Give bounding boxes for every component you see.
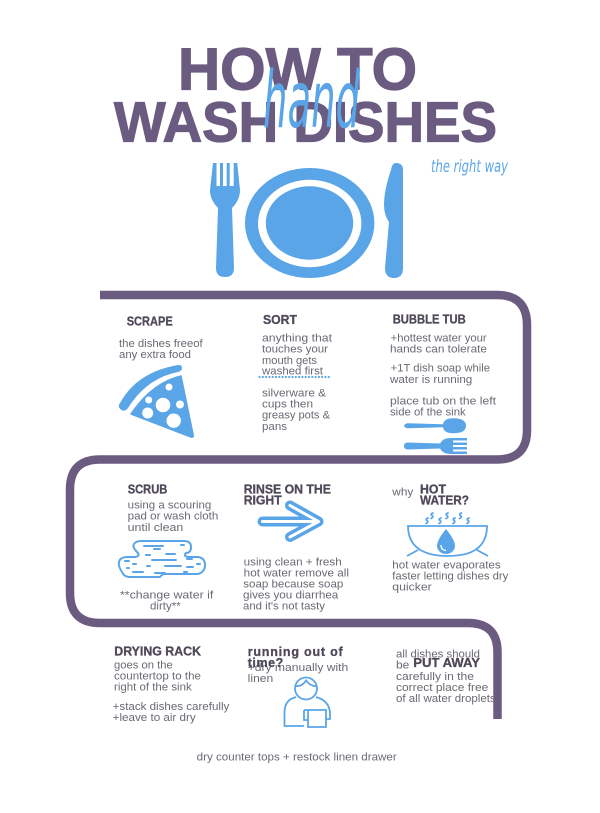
- icon: bowl of hot water: [407, 513, 488, 556]
- text: hot water: faster letting dishes dry: [392, 571, 509, 583]
- text: put away: correct place free: [396, 682, 488, 694]
- icon: arrow: [262, 506, 318, 537]
- text: sort: mouth gets: [262, 355, 317, 367]
- text: bubble tub: [389, 333, 497, 419]
- panel: scrape: [119, 315, 204, 437]
- text: sort: anything that: [262, 333, 333, 345]
- heading: drying rack: DRYING RACK: [114, 645, 201, 659]
- text: rinse: soap because soap: [243, 579, 343, 591]
- icon: fork, plate and knife: [210, 163, 403, 278]
- text: scrub: [128, 500, 218, 534]
- text: sort: [261, 333, 333, 433]
- panel: put away: [396, 649, 496, 705]
- text: bubble tub: water is running: [389, 374, 472, 386]
- icon: spoon and fork: [404, 418, 467, 454]
- text: scrub: until clean: [128, 522, 183, 534]
- text: bubble tub: place tub on the left: [390, 396, 497, 408]
- heading: rinse: [244, 483, 331, 508]
- text: put away: of all water droplets: [396, 693, 496, 705]
- heading: bubble tub: BUBBLE TUB: [393, 313, 466, 327]
- text: sort: greasy pots &: [262, 410, 331, 422]
- panel: drying rack: [113, 645, 230, 724]
- heading: put away: PUT AWAY: [413, 656, 481, 670]
- heading: rinse: RIGHT: [244, 494, 282, 508]
- icon: sponge: [119, 541, 205, 577]
- text: rinse: gives you diarrhea: [243, 590, 339, 602]
- text: put away: all dishes should: [396, 649, 480, 661]
- title: HOW TO: [178, 36, 417, 102]
- heading: why hot water: [391, 483, 469, 508]
- icon: person holding towel: [284, 678, 330, 727]
- text: sort: cups then: [262, 399, 313, 411]
- panel: bubble tub: [389, 313, 497, 454]
- title: [114, 36, 497, 154]
- text: bubble tub: +hottest water your: [391, 333, 487, 345]
- text: drying rack: goes on the: [114, 660, 173, 672]
- text: bubble tub: side of the sink: [390, 407, 466, 419]
- note: change water: dirty**: [150, 601, 181, 613]
- dotted underline: [260, 376, 332, 378]
- heading: rinse: RINSE ON THE: [244, 483, 331, 497]
- footer note: dry counter tops + restock linen drawer: [197, 752, 397, 764]
- text: dry manually: [248, 662, 348, 685]
- heading: running out of time: running out of: [248, 645, 344, 659]
- panel: scrub: [119, 483, 218, 613]
- heading: why hot water: why: [391, 487, 414, 499]
- panel: sort: [260, 313, 333, 433]
- text: hot water: quicker: [392, 582, 432, 594]
- text: sort: touches your: [262, 344, 328, 356]
- text: put away: be: [396, 660, 409, 672]
- note: change water: [120, 590, 214, 613]
- heading: running out of time: [248, 645, 344, 670]
- heading: running out of time: time?: [248, 656, 283, 670]
- text: bubble tub: hands can tolerate: [390, 344, 487, 356]
- heading: why hot water: WATER?: [420, 494, 469, 508]
- text: bubble tub: +1T dish soap while: [391, 363, 490, 375]
- text: dry manually: +dry manually with: [248, 662, 348, 674]
- panel: rinse on the right: [243, 483, 349, 613]
- text: rinse: hot water remove all: [244, 568, 349, 580]
- text: drying rack: right of the sink: [114, 682, 192, 694]
- text: sort: silverware &: [262, 388, 327, 400]
- title: WASH DISHES: [114, 90, 497, 154]
- text: drying rack: countertop to the: [114, 671, 201, 683]
- note: change water: **change water if: [120, 590, 214, 602]
- text: drying rack: +leave to air dry: [113, 712, 196, 724]
- text: rinse: using clean + fresh: [244, 557, 342, 569]
- text: hot water: [392, 560, 509, 594]
- heading: why hot water: HOT: [420, 483, 446, 497]
- winding path divider: [70, 295, 527, 719]
- text: rinse: and it's not tasty: [243, 601, 325, 613]
- text: drying rack: [113, 660, 230, 724]
- text: scrape: the dishes freeof: [119, 338, 204, 350]
- text: drying rack: +stack dishes carefully: [113, 701, 230, 713]
- text: dry manually: linen: [248, 673, 273, 685]
- panel: why hot water: [391, 483, 509, 594]
- text: put away: [396, 649, 496, 705]
- subtitle: the right way: [431, 157, 509, 177]
- icon: pizza slice: [119, 365, 193, 437]
- text: rinse: [243, 557, 349, 613]
- text: scrape: [119, 338, 204, 361]
- text: scrub: using a scouring: [128, 500, 211, 512]
- text: sort: washed first: [261, 366, 324, 378]
- heading: scrub: SCRUB: [128, 483, 167, 497]
- text: sort: pans: [262, 421, 287, 433]
- text: scrape: any extra food: [119, 349, 191, 361]
- text: hot water: hot water evaporates: [392, 560, 501, 572]
- panel: running out of time: [248, 645, 348, 727]
- text: scrub: pad or wash cloth: [128, 511, 218, 523]
- heading: sort: SORT: [263, 313, 297, 327]
- heading: scrape: SCRAPE: [127, 315, 173, 329]
- text: put away: carefully in the: [396, 671, 474, 683]
- title: hand: [263, 56, 360, 146]
